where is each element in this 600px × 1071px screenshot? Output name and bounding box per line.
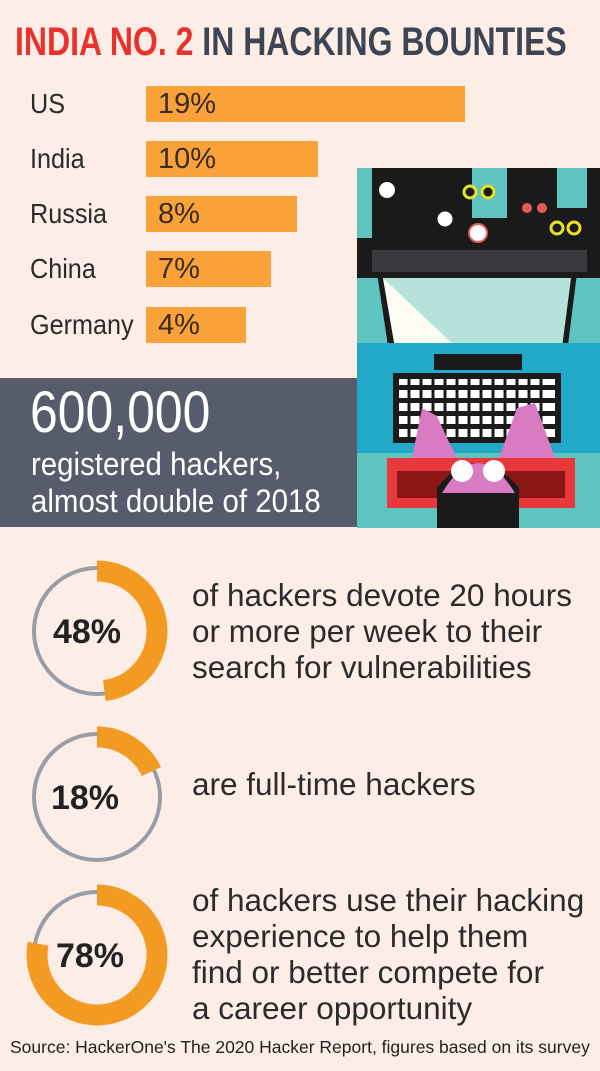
donut 78% xyxy=(26,884,168,1026)
bar China: 7% xyxy=(158,253,200,285)
title: INDIA NO. 2 IN HACKING BOUNTIES xyxy=(15,20,567,64)
illustration: hacker at computer xyxy=(357,168,600,528)
label India: India xyxy=(30,143,85,174)
bar Germany: 4% xyxy=(158,309,200,341)
bar India xyxy=(146,141,318,177)
label China: China xyxy=(30,253,96,284)
donut 48% xyxy=(32,560,168,701)
bar Germany xyxy=(146,307,246,343)
bar Russia xyxy=(146,196,297,232)
hands xyxy=(412,408,457,458)
stat: 78% xyxy=(26,882,584,1026)
donut 48%: 48% xyxy=(53,613,121,651)
text 78%: experience to help them xyxy=(192,918,528,954)
caption: registered hackers, xyxy=(31,446,281,482)
source: Source: HackerOne's The 2020 Hacker Report, figures based on its survey xyxy=(10,1037,590,1057)
text 78%: find or better compete for xyxy=(192,954,544,990)
text 48%: of hackers devote 20 hours xyxy=(192,577,572,613)
text 78% xyxy=(192,882,584,1026)
text 78%: of hackers use their hacking xyxy=(192,882,584,918)
text 48%: or more per week to their xyxy=(192,613,542,649)
caption xyxy=(31,446,321,519)
text 48%: search for vulnerabilities xyxy=(192,649,532,685)
label US: US xyxy=(30,88,65,119)
bar Russia: 8% xyxy=(158,198,200,230)
face xyxy=(437,463,519,528)
bar India: 10% xyxy=(158,143,216,175)
text 18%: are full-time hackers xyxy=(192,766,476,802)
label Germany: Germany xyxy=(30,309,134,340)
text 48% xyxy=(192,577,572,685)
stat: 48% xyxy=(32,560,572,701)
donut 78%: 78% xyxy=(56,937,124,975)
keyboard xyxy=(393,373,561,443)
big number: 600,000 xyxy=(30,380,210,445)
monitor xyxy=(377,273,577,353)
bar US xyxy=(146,86,465,122)
bar China xyxy=(146,251,271,287)
text 78%: a career opportunity xyxy=(192,990,472,1026)
stat: 18% xyxy=(32,726,476,862)
donut 18% xyxy=(32,726,162,862)
caption: almost double of 2018 xyxy=(31,483,321,519)
label Russia: Russia xyxy=(30,198,107,229)
donut 18%: 18% xyxy=(51,779,119,817)
panel: registered hackers xyxy=(0,378,357,527)
bar chart xyxy=(30,86,465,343)
bar US: 19% xyxy=(158,88,216,120)
